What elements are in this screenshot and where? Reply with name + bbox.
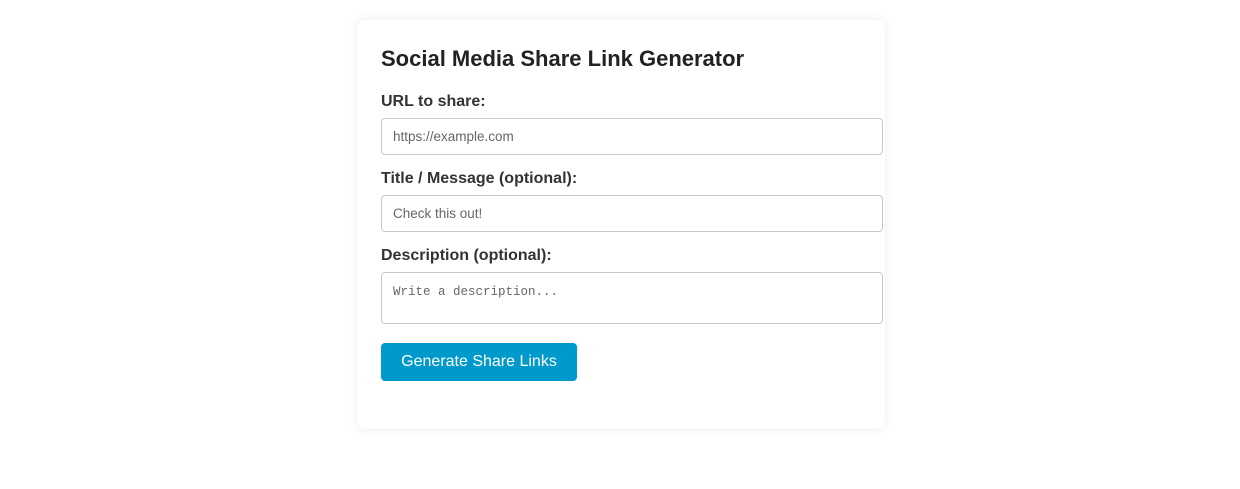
- button: generate: [381, 343, 577, 381]
- input: title: [381, 195, 883, 232]
- label: url: URL to share:: [381, 93, 486, 110]
- label: title: Title / Message (optional):: [381, 170, 577, 187]
- panel: form card: [357, 20, 885, 429]
- input: title: Check this out!: [393, 206, 482, 221]
- title: Social Media Share Link Generator: [381, 46, 744, 71]
- input: url: https://example.com: [393, 129, 514, 144]
- input: url: [381, 118, 883, 155]
- label: description: Description (optional):: [381, 247, 552, 264]
- textarea: description: [381, 272, 883, 324]
- textarea: description: Write a description...: [393, 285, 558, 299]
- button: generate: Generate Share Links: [401, 353, 557, 370]
